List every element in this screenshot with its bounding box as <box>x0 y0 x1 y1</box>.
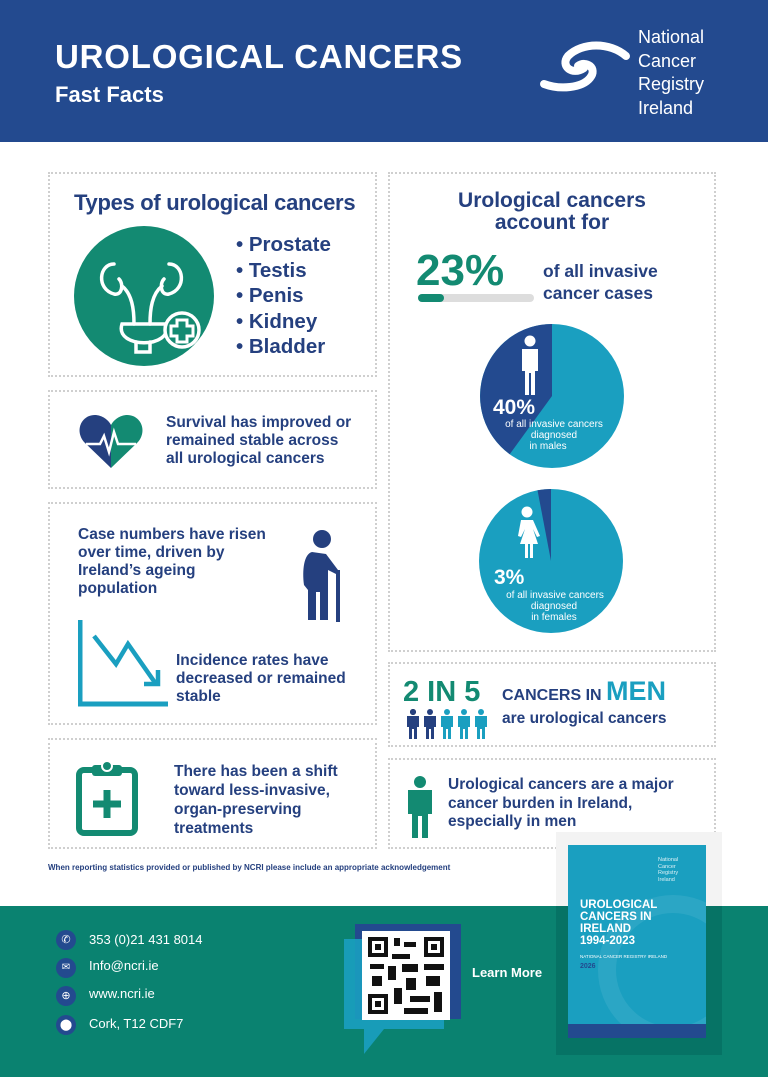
panel: trends <box>48 502 377 725</box>
report cover: 1994-2023 <box>580 935 635 947</box>
list: • Bladder <box>236 335 325 358</box>
text: cases: Ireland’s ageing <box>78 562 195 579</box>
contacts: ⬤ <box>60 1019 72 1031</box>
icon: heart <box>80 415 142 468</box>
contacts: ✆ <box>61 934 71 946</box>
contacts: 353 (0)21 431 8014 <box>89 932 202 947</box>
header <box>0 0 768 142</box>
chart: male pie: diagnosed <box>531 430 577 441</box>
report cover: Ireland <box>658 876 675 882</box>
text: Survival has improved or <box>166 414 351 431</box>
text: remained stable across <box>166 432 338 449</box>
icon: man <box>408 776 432 838</box>
report cover: IRELAND <box>580 923 631 935</box>
report cover: 2026 <box>580 963 596 970</box>
logo <box>540 27 704 118</box>
contacts <box>56 930 202 1035</box>
chart: female pie: in females <box>531 612 577 623</box>
logo: Registry <box>638 74 704 94</box>
report cover: Registry <box>658 870 678 876</box>
qr code <box>344 924 461 1054</box>
panel: 2 in 5: are urological cancers <box>502 710 667 727</box>
text: cases <box>78 526 266 597</box>
heading: Types of urological cancers <box>74 190 355 215</box>
chart: female pie: of all invasive cancers <box>506 590 604 601</box>
text: CANCERS IN MEN <box>502 676 666 706</box>
learn more: Learn More <box>472 965 542 980</box>
icon: elderly person <box>303 530 340 622</box>
chart: female pie <box>479 489 623 633</box>
logo: Ireland <box>638 98 693 118</box>
contacts: ✉ <box>62 962 70 973</box>
contacts: Info@ncri.ie <box>89 958 159 973</box>
logo: National <box>638 27 704 47</box>
text: There has been a shift <box>174 763 338 780</box>
text: Urological cancers are a major <box>448 776 674 793</box>
report cover: Cancer <box>658 864 676 870</box>
text: organ-preserving <box>174 801 301 818</box>
list <box>236 233 331 358</box>
panel: share <box>388 172 716 652</box>
panel: 2 in 5 <box>388 662 716 747</box>
text <box>448 776 674 830</box>
list: • Prostate <box>236 233 331 256</box>
contacts: ⊕ <box>61 990 71 1002</box>
contacts: www.ncri.ie <box>89 986 155 1001</box>
text: incidence <box>176 652 346 705</box>
text: incidence: stable <box>176 688 221 705</box>
panel: treatment <box>48 738 377 849</box>
text: all urological cancers <box>166 450 325 467</box>
chart: male pie: of all invasive cancers <box>505 419 603 430</box>
heading: Urological cancers <box>458 189 646 212</box>
text <box>174 763 338 837</box>
stat text <box>543 261 658 303</box>
subtitle: Fast Facts <box>55 82 164 107</box>
contacts: Cork, T12 CDF7 <box>89 1016 183 1031</box>
text: treatments <box>174 820 253 837</box>
report cover: CANCERS IN <box>580 911 652 923</box>
icon: five men <box>407 709 487 739</box>
text: especially in men <box>448 813 576 830</box>
report cover <box>556 832 722 1055</box>
report cover: NATIONAL CANCER REGISTRY IRELAND <box>580 954 667 959</box>
text: incidence: Incidence rates have <box>176 652 328 669</box>
heading: account for <box>495 211 609 234</box>
icon: downward chart <box>78 620 168 706</box>
text: incidence: decreased or remained <box>176 670 346 687</box>
panel: survival <box>48 390 377 489</box>
chart: female pie: diagnosed <box>531 601 577 612</box>
panel: burden <box>388 758 716 849</box>
logo: Cancer <box>638 50 696 70</box>
list: • Penis <box>236 284 304 307</box>
panel: types <box>48 172 377 377</box>
icon: urinary system <box>74 226 214 366</box>
progress bar <box>418 294 534 302</box>
stat 23%: 23% <box>416 246 504 295</box>
chart: male pie: in males <box>529 441 567 452</box>
text: toward less-invasive, <box>174 782 330 799</box>
stat text: of all invasive <box>543 261 658 281</box>
report cover: UROLOGICAL <box>580 899 657 911</box>
icon: clipboard <box>76 762 138 836</box>
chart: male pie <box>480 324 624 468</box>
list: • Kidney <box>236 310 317 332</box>
list: • Testis <box>236 258 307 282</box>
text: cases: over time, driven by <box>78 544 224 561</box>
text: cases: Case numbers have risen <box>78 526 266 543</box>
report cover: National <box>658 857 678 863</box>
text: cases: population <box>78 580 157 597</box>
chart: male pie: 40% <box>493 396 535 419</box>
footer <box>0 906 768 1077</box>
title: UROLOGICAL CANCERS <box>55 38 463 75</box>
text <box>166 414 351 467</box>
stat text: cancer cases <box>543 283 653 303</box>
heading <box>458 189 646 234</box>
footnote: When reporting statistics provided or published by NCRI please include an appropriate acknowledgement <box>48 863 450 872</box>
stat 2 in 5: 2 IN 5 <box>403 676 480 708</box>
text: cancer burden in Ireland, <box>448 794 632 812</box>
chart: female pie: 3% <box>494 566 525 589</box>
